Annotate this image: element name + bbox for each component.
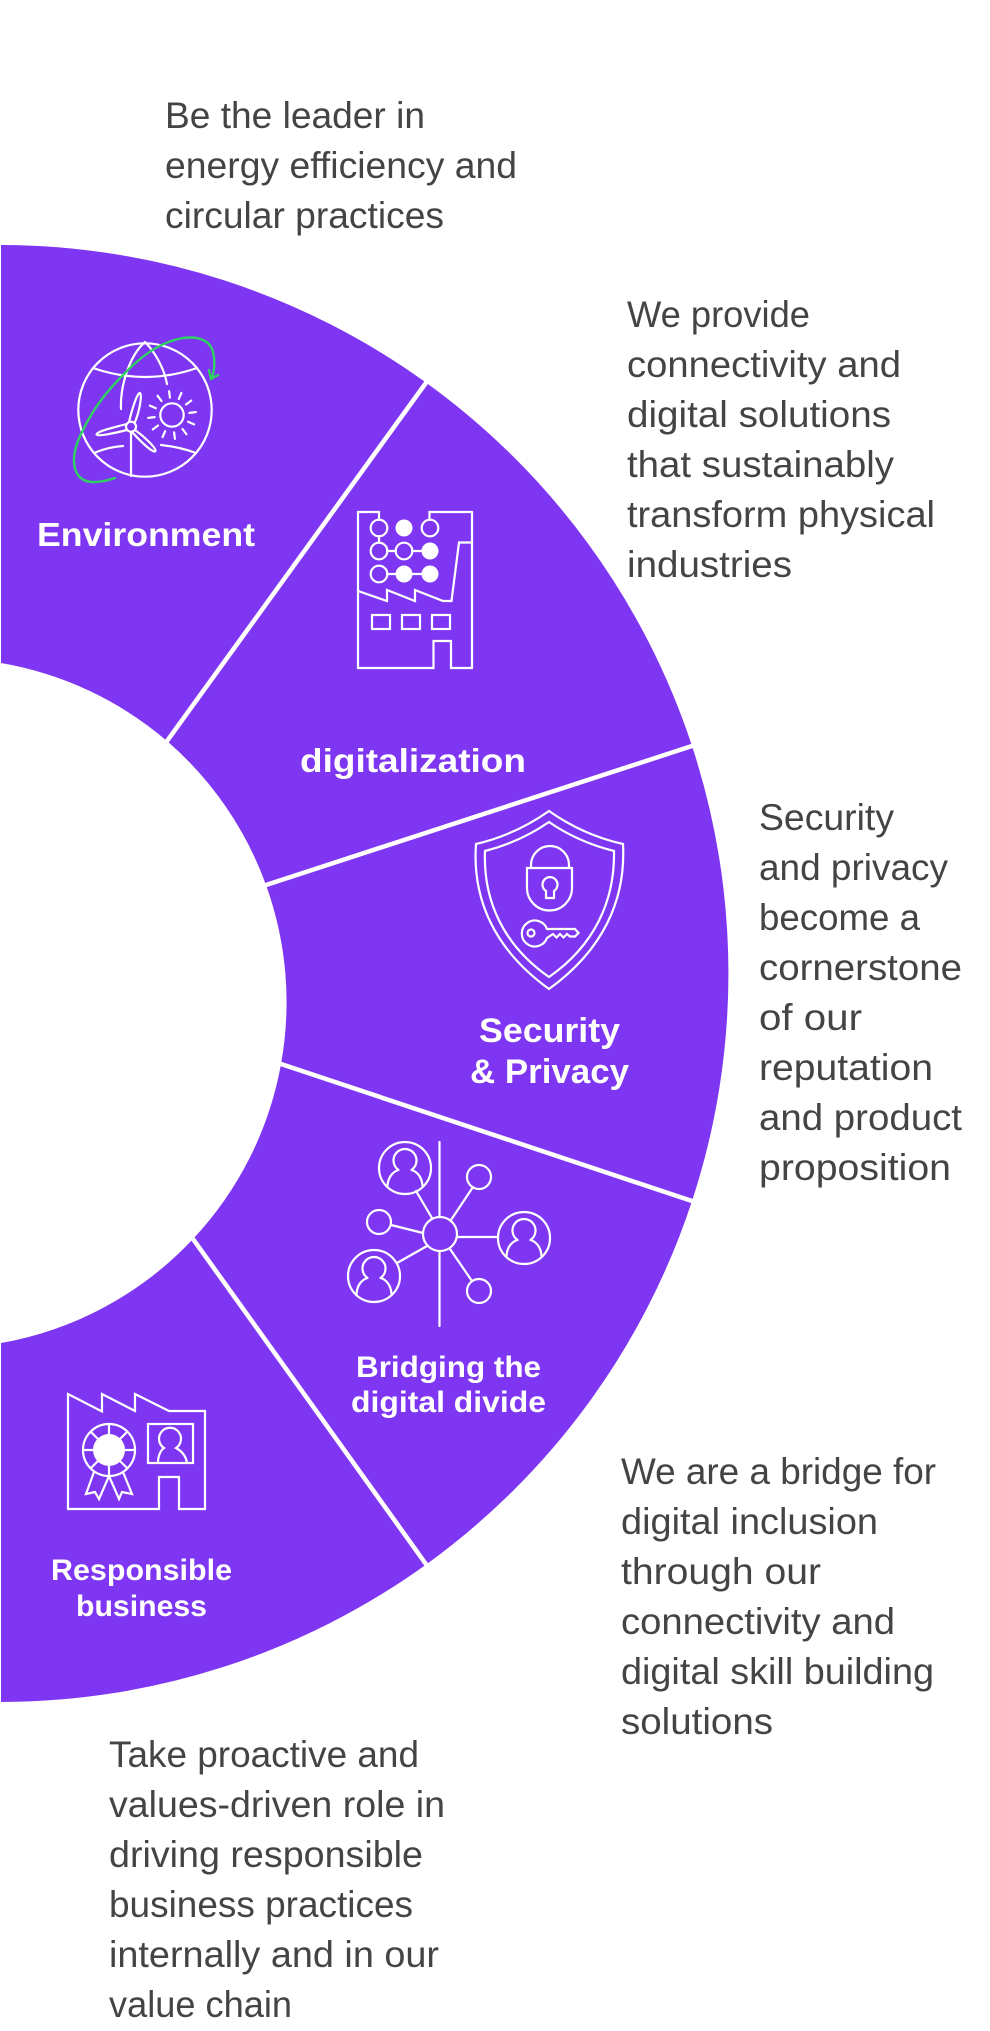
text block: responsible business description: Take proactive and <box>109 1734 419 1775</box>
wedge: digitalization <box>167 383 692 885</box>
text block: responsible business description: business practices <box>109 1884 413 1925</box>
text block: digitalization description: We provide <box>627 294 810 335</box>
label: Security & Privacy: Security <box>479 1012 620 1050</box>
label: digitalization: digitalization <box>300 742 526 779</box>
wedge: Security & Privacy <box>266 746 728 1201</box>
text block: digital divide description: through our <box>621 1551 821 1592</box>
text block: digitalization description: transform physical <box>627 494 935 535</box>
wedge: Responsible business <box>1 1239 426 1702</box>
label: Security & Privacy <box>470 1012 629 1091</box>
label: Security & Privacy: & Privacy <box>470 1053 629 1091</box>
label: Bridging the digital divide: Bridging the <box>356 1351 541 1384</box>
text block: environment description: circular practices <box>165 195 444 236</box>
text block: digital divide description: digital inclusion <box>621 1501 878 1542</box>
label: Environment: Environment <box>37 516 255 553</box>
text block: security description: become a <box>759 897 920 938</box>
text block: security description: of our <box>759 997 862 1038</box>
panel: Responsible business <box>1 1239 426 1702</box>
icon: shield with lock and key <box>476 811 623 989</box>
text block: digitalization description: digital solutions <box>627 394 891 435</box>
text block: security description: and product <box>759 1097 963 1138</box>
text block: digitalization description: that sustainably <box>627 444 895 485</box>
text block: responsible business description: driving responsible <box>109 1834 423 1875</box>
wedge: Environment <box>1 245 426 741</box>
text block: security description: cornerstone <box>759 947 962 988</box>
text block: environment description: energy efficiency and <box>165 145 517 186</box>
wedge: Bridging the digital divide <box>193 1064 692 1565</box>
text block: security description: proposition <box>759 1147 951 1188</box>
label: Responsible business <box>51 1554 232 1623</box>
panel: Environment <box>1 245 426 741</box>
text block: environment description <box>165 95 517 236</box>
label: Responsible business: business <box>76 1590 207 1623</box>
text block: responsible business description: values-driven role in <box>109 1784 445 1825</box>
icon: digital factory <box>358 512 472 668</box>
text block: digital divide description: We are a bridge for <box>621 1451 936 1492</box>
icon: factory with rosette and portrait <box>68 1394 205 1509</box>
text block: digital divide description: connectivity and <box>621 1601 895 1642</box>
text block: digitalization description <box>627 294 935 585</box>
text block: digital divide description <box>621 1451 936 1742</box>
label: Bridging the digital divide <box>351 1351 546 1419</box>
text block: responsible business description: value chain <box>109 1984 292 2025</box>
text block: responsible business description <box>109 1734 445 2025</box>
panel: Bridging the digital divide <box>193 1064 692 1565</box>
text block: security description: Security <box>759 797 895 838</box>
text block: security description <box>759 797 963 1188</box>
text block: responsible business description: internally and in our <box>109 1934 439 1975</box>
text block: security description: reputation <box>759 1047 933 1088</box>
text block: digital divide description: digital skill building <box>621 1651 934 1692</box>
panel: digitalization <box>167 383 692 885</box>
label: Bridging the digital divide: digital divide <box>351 1386 546 1419</box>
icon: people network <box>348 1142 550 1326</box>
text block: environment description: Be the leader in <box>165 95 425 136</box>
text block: digital divide description: solutions <box>621 1701 773 1742</box>
text block: digitalization description: industries <box>627 544 792 585</box>
label: Responsible business: Responsible <box>51 1554 232 1587</box>
panel: Security & Privacy <box>266 746 728 1201</box>
text block: security description: and privacy <box>759 847 948 888</box>
icon: globe with wind turbine and sun <box>74 338 218 482</box>
text block: digitalization description: connectivity and <box>627 344 901 385</box>
